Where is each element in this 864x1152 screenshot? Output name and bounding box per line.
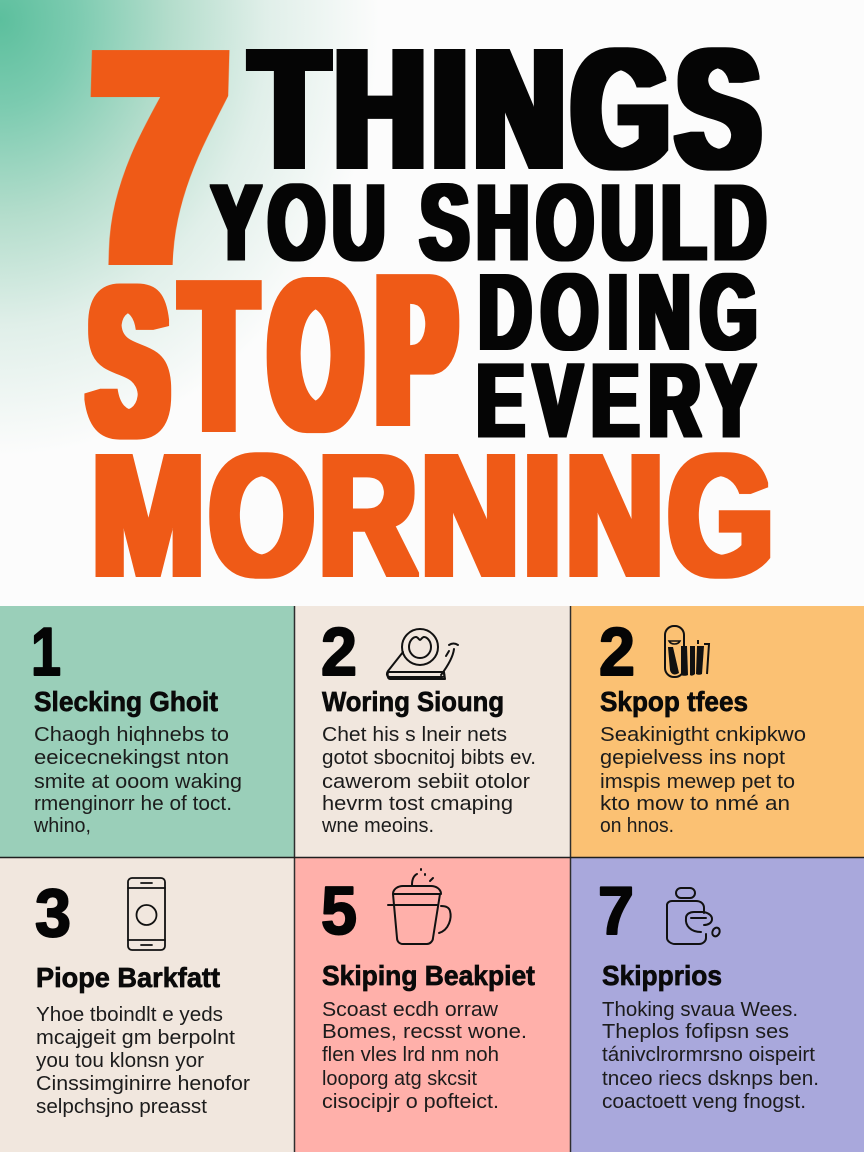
card 5 heading: Skiping Beakpiet [322,960,535,991]
title: THINGS: THINGS [251,14,767,204]
number 5: 5 [321,873,357,949]
panel: card 6 [571,858,864,1152]
card 5 body: Scoast ecdh orraw [322,999,499,1021]
card 4 body: Yhoe tboindlt e yeds [36,1004,223,1026]
card 1 body: Chaogh hiqhnebs to [34,724,229,746]
title: DOING: DOING [478,251,767,372]
card 3 body [600,724,806,837]
title: YOU SHOULD: YOU SHOULD [212,161,773,283]
icon: alarm on bed [387,629,458,679]
card 6 body: Theplos fofipsn ses [602,1021,789,1043]
icon: steaming mug [388,869,451,944]
card 1 heading: Slecking Ghoit [34,686,218,717]
card 4 body: mcajgeit gm berpolnt [36,1027,235,1049]
card 2 body: cawerom sebiit otolor [322,771,530,793]
card 2 body: gotot sbocnitoj bibts ev. [322,747,536,769]
title [90,0,778,612]
card 3 body: on hnos. [600,815,674,837]
card 4 body [36,1004,250,1118]
card 5 body [322,999,527,1113]
panel: card 3 [571,606,864,857]
panel: card 1 [0,606,294,857]
card 4 heading: Piope Barkfatt [36,962,220,993]
card 2 body: wne meoins. [321,815,434,837]
icon: bag and bottle [665,626,709,677]
card 6 body: coactoett veng fnogst. [602,1091,806,1113]
card 4 body: Cinssimginirre henofor [36,1073,250,1095]
card 5 body: Bomes, recsst wone. [322,1021,527,1043]
icon: phone [128,878,165,950]
card 4 body: you tou klonsn yor [36,1050,204,1072]
number 7: 7 [598,873,634,949]
card 1 body: smite at ooom waking [34,771,242,793]
title: STOP: STOP [90,232,471,480]
card 6 body: Thoking svaua Wees. [602,999,798,1021]
card 3 body: Seakinigtht cnkipkwo [600,724,806,746]
card 3 body: gepielvess ins nopt [600,747,785,769]
card 5 body: looporg atg skcsit [322,1068,477,1090]
number 2: 2 [599,614,635,690]
number 2: 2 [321,614,357,690]
card 6 heading: Skipprios [602,960,722,991]
panel: card 5 [295,858,570,1152]
card 6 body: tnceo riecs dsknps ben. [602,1068,819,1090]
card 5 body: flen vles lrd nm noh [322,1044,499,1066]
card 3 heading: Skpop tfees [600,686,748,717]
panel: card 4 [0,858,294,1152]
card 5 body: cisocipjr o pofteict. [322,1091,499,1113]
card 2 heading: Woring Sioung [322,686,504,717]
card 6 body [602,999,819,1113]
card 2 body [321,724,536,837]
card 2 body: hevrm tost cmaping [322,793,513,815]
card 1 body: rmenginorr he of toct. [34,793,232,815]
title: EVERY: EVERY [477,343,765,460]
icon: jar with lid [667,888,721,944]
panel: card 2 [295,606,570,857]
card 6 body: tánivclrormrsno oispeirt [602,1044,815,1066]
card 1 body [33,724,242,837]
card 2 body: Chet his s lneir nets [322,724,507,746]
number 1: 1 [31,614,61,690]
card 4 body: selpchsjno preasst [36,1096,207,1118]
card 3 body: kto mow to nmé an [600,793,790,815]
card 1 body: eeicecnekingst nton [34,747,229,769]
title: MORNING: MORNING [92,419,778,612]
card 3 body: imspis mewep pet to [600,771,795,793]
number 3: 3 [35,875,71,951]
title: numeral 7: 7 [91,0,225,321]
card 1 body: whino, [33,815,91,837]
